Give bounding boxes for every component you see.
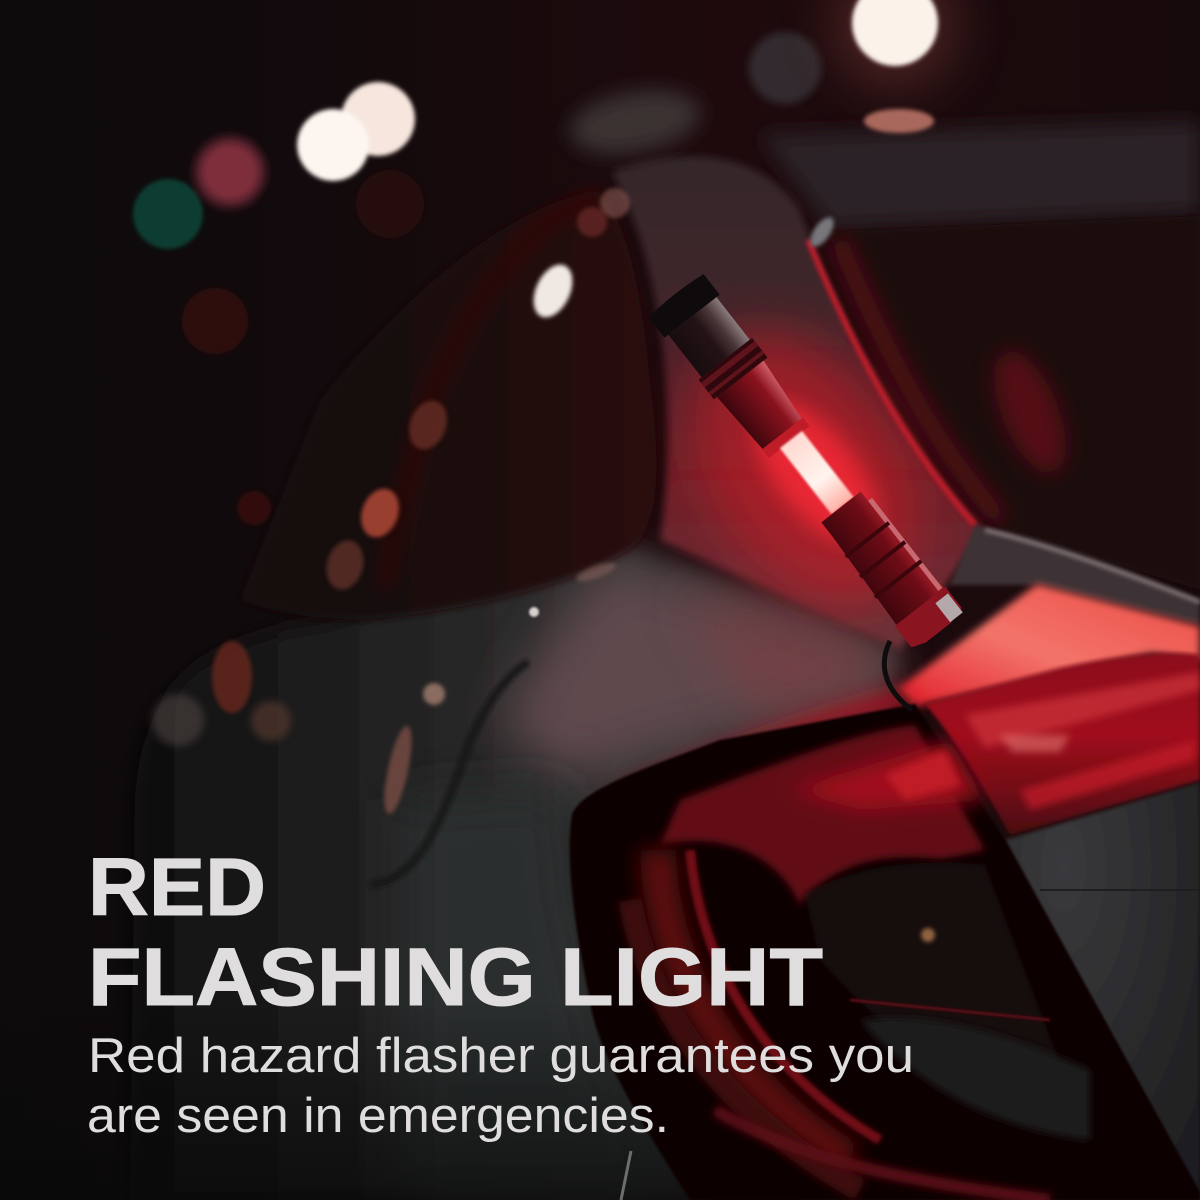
title: RED [88,842,266,933]
flashlight glow [732,381,899,564]
mirror highlight [526,258,580,324]
bokeh lights upper left [133,82,424,354]
cable [884,641,912,710]
upper red band [660,725,985,905]
description: Red hazard flasher guarantees you [88,1029,914,1083]
lower red arcs [658,850,850,1160]
body strip at right [950,525,1200,625]
flashlight handle [818,488,944,625]
description: are seen in emergencies. [87,1089,669,1143]
side mirror [237,188,657,619]
car roof panel top right [760,122,1200,228]
tail light [570,653,1200,1200]
flashlight collar [699,338,767,399]
car body: lower door panel [0,545,900,1200]
rear quarter panel bottom right [1005,782,1200,1200]
flashlight head [647,273,720,338]
lit reflection panel above tail light [899,584,1200,706]
flashlight [644,269,971,656]
smoked inner lens [805,863,1085,1130]
red glow strip above tail light [620,688,915,800]
bokeh lights lower left on door [152,559,618,816]
fender lit by red glow [612,156,985,650]
bokeh lights top centre and right [565,0,957,163]
title [88,842,823,1023]
dark quarter panel right [806,213,1200,590]
title: FLASHING LIGHT [88,932,823,1023]
fender glow around flashlight [648,293,962,647]
outer lens upper right [925,653,1200,835]
description [87,1029,914,1143]
flashlight light tube [780,431,854,514]
